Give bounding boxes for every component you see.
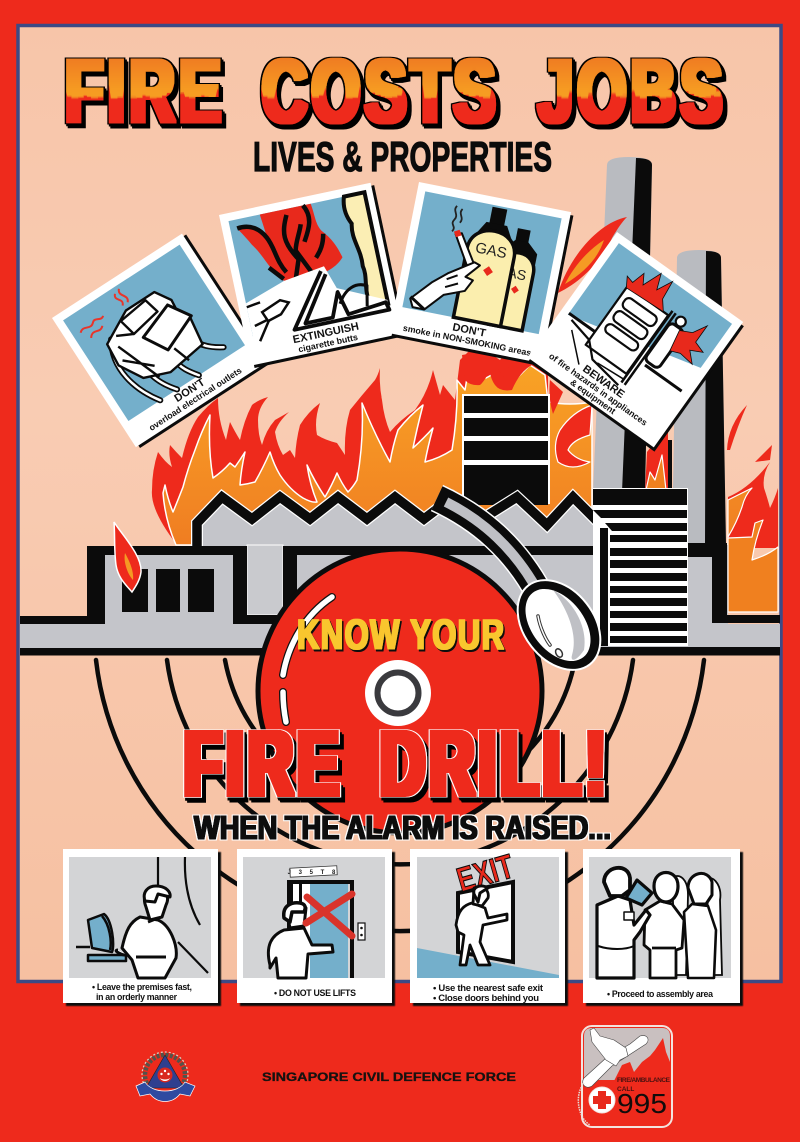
stray flame by chimney (558, 217, 627, 293)
sound wave arcs around alarm (96, 660, 704, 931)
Singapore Civil Defence Force emblem (136, 1052, 195, 1102)
step card: leave the premises: • Leave the premises fast, (92, 982, 192, 992)
third person (684, 873, 716, 978)
pale yellow bin shape (342, 192, 388, 309)
step card: leave the premises (63, 849, 221, 1006)
safety card: electrical outlets: overload electrical outlets (147, 365, 244, 433)
small flame on left building (114, 522, 141, 592)
leader with clipboard (597, 868, 652, 978)
title: fire costs jobs: FIRE (65, 42, 225, 142)
crowd behind (672, 876, 722, 975)
lift door (287, 880, 365, 978)
title: fire costs jobs: JOBS (538, 42, 727, 142)
safety card: no smoking gas cylinders: smoke in NON-SMOKING areas (402, 323, 532, 358)
chimneys (593, 157, 726, 545)
step card: nearest safe exit (410, 847, 568, 1006)
flame in ashtray (235, 200, 345, 290)
slogan: know your: KNOW YOUR (297, 610, 505, 658)
right side flames (645, 405, 778, 612)
second gas cylinder (489, 226, 541, 331)
ashtray white area (242, 255, 389, 339)
emergency call badge 995: 995 (617, 1088, 667, 1119)
safety card: electrical outlets (52, 232, 270, 450)
emergency call badge 995 (578, 1026, 672, 1127)
safety card: beware appliances: BEWARE (580, 363, 627, 401)
title: fire costs jobs: COSTS (262, 42, 500, 142)
hand holding cigarette (409, 226, 485, 318)
step card: proceed to assembly area: • Proceed to assembly area (607, 989, 713, 999)
step card: do not use lifts: • DO NOT USE LIFTS (274, 988, 356, 998)
fleeing person (268, 903, 333, 978)
step card: do not use lifts: J 3 5 T 8 (288, 870, 338, 876)
machine flames (621, 258, 681, 313)
step card: nearest safe exit: • Close doors behind you (433, 993, 539, 1004)
fire alarm bell (258, 549, 542, 833)
exit sign: EXIT (453, 847, 518, 900)
plug cluster drawing (96, 282, 211, 394)
peach inner panel with navy border (18, 26, 781, 982)
safety card: beware appliances: & equipment (568, 377, 618, 416)
red cross mark (306, 894, 352, 936)
alarm striker hammer (437, 498, 617, 686)
person leaving (456, 886, 507, 965)
cables (104, 290, 229, 409)
step card: leave the premises: in an orderly manner (96, 992, 178, 1002)
emergency call badge 995: FIRE/AMBULANCE (617, 1077, 671, 1084)
slogan: fire drill: DRILL! (380, 712, 610, 815)
first gas cylinder: GAS (474, 239, 508, 262)
computer monitor (76, 914, 126, 961)
safety card: no smoking gas cylinders: DON'T (451, 321, 487, 340)
safety card: beware appliances (526, 232, 746, 452)
step card: nearest safe exit: • Use the nearest safe exit (433, 983, 544, 994)
striped tower building (462, 394, 550, 505)
exit door (458, 882, 513, 962)
second person (644, 872, 684, 978)
office worker (116, 886, 176, 978)
subheading: when the alarm is raised: WHEN THE ALARM IS RAISED... (194, 809, 611, 846)
machine with rollers (548, 262, 717, 422)
factory building, grey body and outlines (20, 497, 780, 656)
striped building right (593, 488, 780, 655)
safety card: electrical outlets: DON'T (172, 376, 207, 405)
step card: do not use lifts (237, 849, 395, 1006)
subtitle: lives and properties: LIVES & PROPERTIES (253, 133, 552, 180)
safety card: beware appliances: of fire hazards in appliances (547, 351, 649, 428)
background fire: main flames (152, 345, 592, 545)
step card: proceed to assembly area (583, 849, 743, 1006)
hand with telephone (583, 1028, 648, 1087)
safety card: no smoking gas cylinders (389, 182, 574, 367)
safety card: extinguish cigarette butts: cigarette butts (297, 332, 359, 354)
emergency call badge 995: CALL (617, 1086, 634, 1093)
second gas cylinder: AS (506, 264, 528, 283)
safety card: extinguish cigarette butts (219, 182, 406, 369)
safety card: extinguish cigarette butts: EXTINGUISH (292, 320, 360, 346)
first gas cylinder (453, 203, 523, 327)
slogan: fire drill: FIRE (184, 712, 343, 815)
organisation name: SINGAPORE CIVIL DEFENCE FORCE (262, 1070, 516, 1084)
